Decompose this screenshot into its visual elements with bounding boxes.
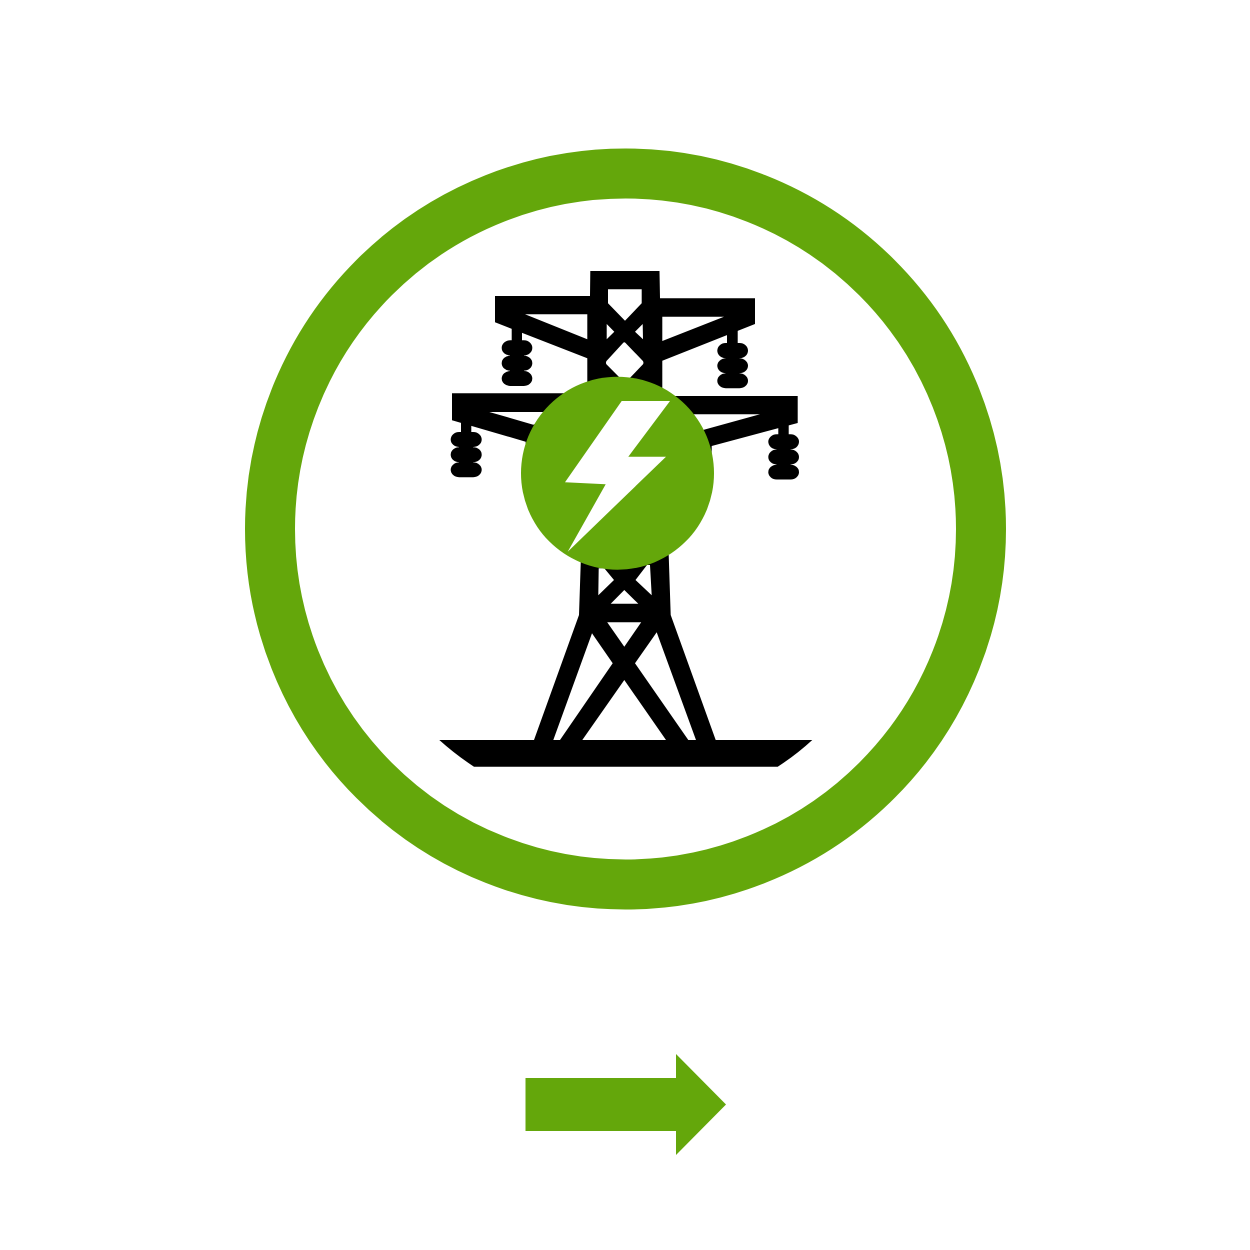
tower: upper section and crossarm (495, 271, 755, 395)
icon: lightning badge (521, 377, 714, 570)
insulator: upper right (717, 320, 748, 388)
green ring (270, 174, 981, 884)
icon: transmission tower (439, 271, 812, 767)
insulator: lower right (768, 420, 799, 480)
tower: lower body and base (439, 555, 812, 767)
lightning bolt (565, 401, 670, 552)
insulator: lower left (451, 418, 482, 477)
badge circle (521, 377, 714, 570)
arrow pointing right (526, 1054, 726, 1155)
insulator: upper left (502, 318, 532, 386)
tower: lower crossarm (452, 393, 798, 470)
